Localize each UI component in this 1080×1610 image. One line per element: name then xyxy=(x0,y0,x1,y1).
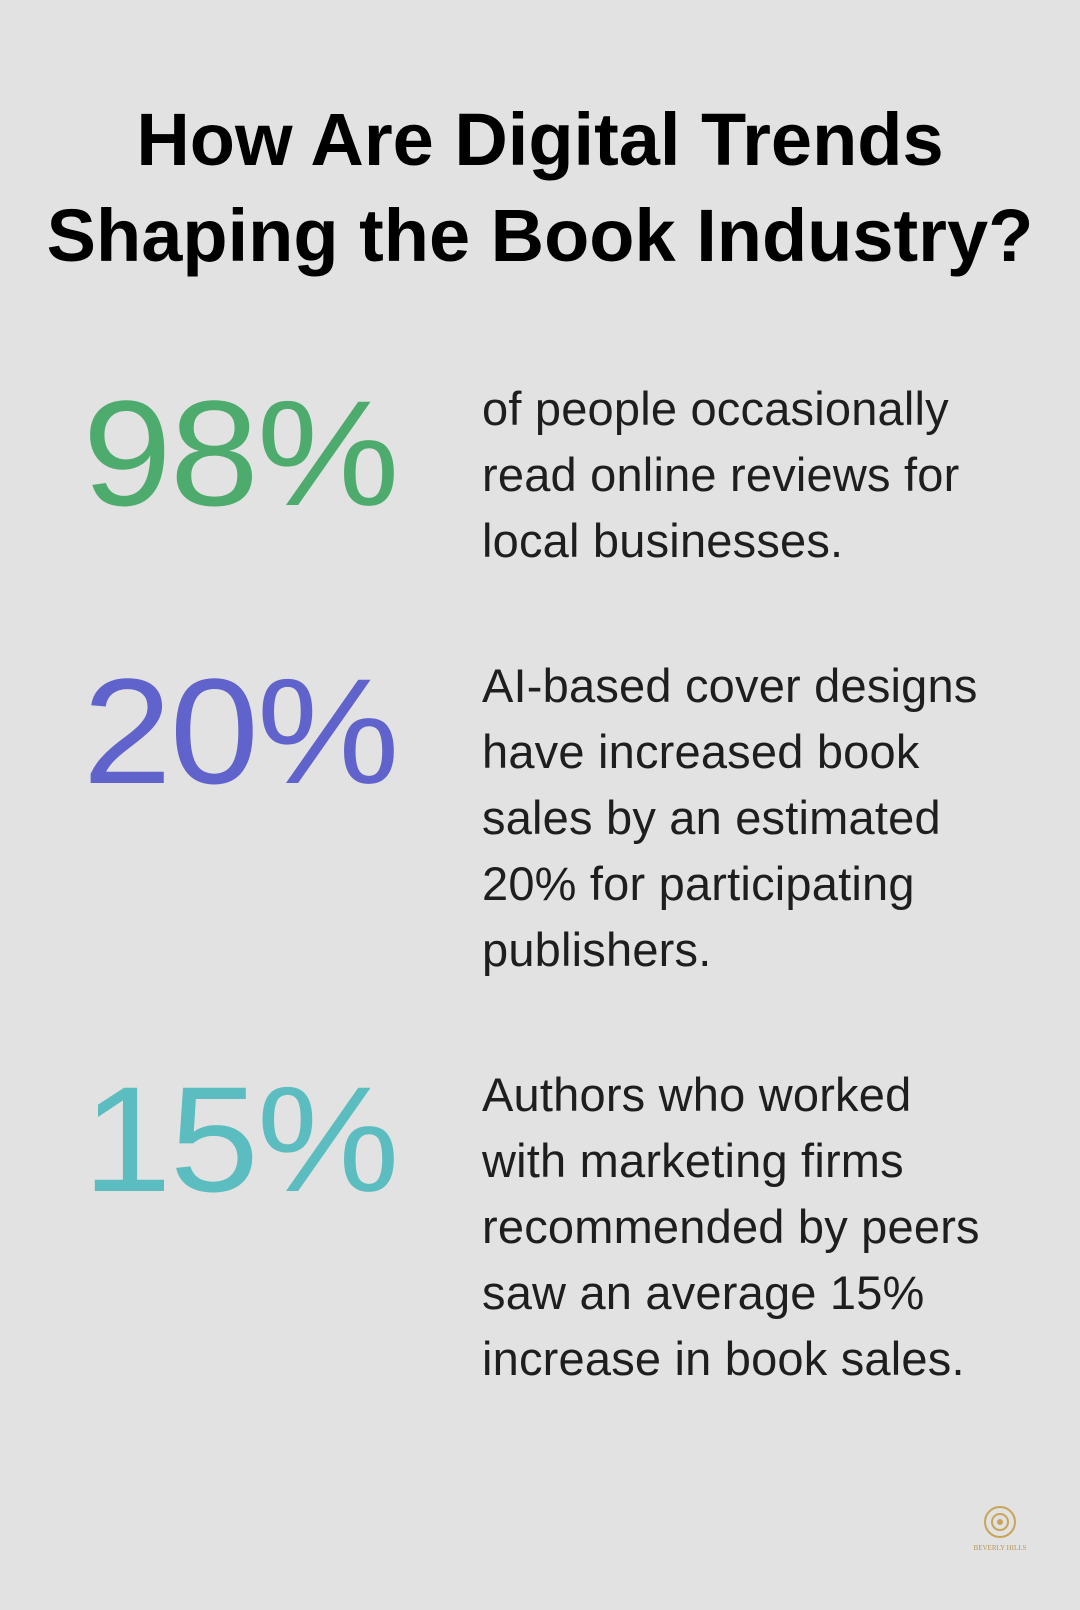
text: 15% description: Authors who worked xyxy=(482,1068,911,1121)
title: Shaping the Book Industry? xyxy=(47,194,1033,277)
text: 15% description: with marketing firms xyxy=(482,1134,904,1187)
text: 20% description: sales by an estimated xyxy=(482,791,941,844)
text: 98% description: read online reviews for xyxy=(482,448,959,501)
text: 15% description: increase in book sales. xyxy=(482,1332,965,1385)
logo xyxy=(974,1506,1026,1552)
text: 15% description: saw an average 15% xyxy=(482,1266,925,1319)
stat: 20%: 20% xyxy=(83,647,397,815)
text: 20% description: have increased book xyxy=(482,725,920,778)
text: 20% description: AI-based cover designs xyxy=(482,659,978,712)
text: 98% description: local businesses. xyxy=(482,514,843,567)
stat: 98%: 98% xyxy=(83,369,397,537)
text: 20% description: publishers. xyxy=(482,923,712,976)
logo: BEVERLY HILLS xyxy=(974,1544,1026,1552)
text: 20% description xyxy=(482,659,978,976)
text: 15% description: recommended by peers xyxy=(482,1200,980,1253)
stat: 15%: 15% xyxy=(83,1055,397,1223)
text: 98% description xyxy=(482,382,959,567)
text: 98% description: of people occasionally xyxy=(482,382,949,435)
text: 20% description: 20% for participating xyxy=(482,857,915,910)
text: 15% description xyxy=(482,1068,980,1385)
title: How Are Digital Trends xyxy=(136,98,944,181)
title xyxy=(47,98,1033,277)
